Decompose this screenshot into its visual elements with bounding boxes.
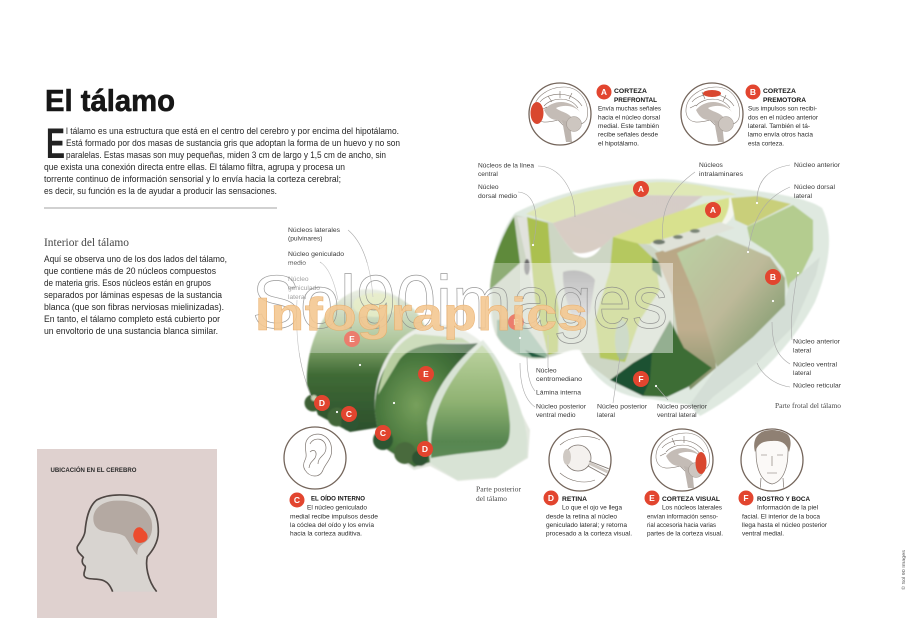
badges on illustration: F bbox=[638, 374, 644, 384]
callout F: rostro y boca: F bbox=[743, 493, 749, 503]
dark green base bbox=[610, 320, 712, 397]
title: El tálamo bbox=[45, 83, 175, 118]
callout D: retina: Lo que el ojo ve llega bbox=[562, 504, 622, 512]
anatomical labels: Núcleo posterior bbox=[657, 404, 708, 410]
nucleus marker dots bbox=[336, 202, 799, 413]
section: interior del tálamo: separados por láminas espesas de la sustancia bbox=[44, 290, 223, 300]
anatomical labels bbox=[288, 162, 842, 503]
callout E: corteza visual: partes de la corteza visual. bbox=[647, 530, 723, 538]
callout A: corteza prefrontal: hacia el núcleo dorsal bbox=[598, 114, 660, 122]
callout B: corteza premotora: esta corteza. bbox=[748, 140, 784, 148]
leader lines bbox=[297, 165, 797, 407]
lower left teal area bbox=[497, 318, 548, 358]
callout C: el oído interno bbox=[284, 427, 378, 538]
illustration: thalamus back part bbox=[304, 289, 530, 481]
icon: brain with prefrontal cortex bbox=[529, 83, 591, 145]
badges on illustration: F bbox=[513, 317, 519, 327]
callout C: el oído interno: EL OÍDO INTERNO bbox=[311, 494, 365, 502]
grey band with nuclei bbox=[650, 222, 735, 252]
section: interior del tálamo: que contiene más de 20 núcleos compuestos bbox=[44, 266, 216, 276]
anatomical labels: ventral lateral bbox=[657, 412, 697, 419]
callout A: corteza prefrontal: recibe señales desde bbox=[598, 132, 658, 138]
anatomical labels: Núcleo posterior bbox=[597, 404, 648, 410]
cross section base bbox=[492, 215, 680, 385]
anatomical labels: Parte frotal del tálamo bbox=[775, 402, 842, 410]
callout A: corteza prefrontal: A bbox=[601, 87, 607, 97]
badges on illustration: E bbox=[423, 369, 429, 379]
section: interior del tálamo: Interior del tálamo bbox=[44, 237, 129, 249]
pink band bbox=[553, 195, 703, 257]
intro text block: paralelas. Estas masas son muy pequeñas, miden 3 cm de largo y 1,5 cm de ancho, sin bbox=[66, 150, 386, 160]
badges on illustration bbox=[314, 181, 781, 457]
anatomical labels: Núcleo ventral bbox=[793, 362, 838, 368]
anatomical labels: Núcleos bbox=[699, 162, 724, 169]
intro text block: l tálamo es una estructura que está en el centro del cerebro y por encima del hipotálamo. bbox=[66, 126, 399, 136]
callout A: corteza prefrontal: PREFRONTAL bbox=[614, 97, 657, 104]
anatomical labels: Núcleo bbox=[536, 368, 557, 374]
icon: eye bbox=[549, 429, 612, 491]
callout F: rostro y boca: ventral medial. bbox=[742, 530, 784, 538]
intro text block: Está formado por dos masas de sustancia gris que adoptan la forma de un huevo y no son bbox=[66, 138, 400, 148]
badges on illustration: C bbox=[380, 428, 386, 438]
second yellow band bbox=[613, 197, 735, 244]
callout C: el oído interno: C bbox=[294, 495, 300, 505]
anatomical labels: Núcleo posterior bbox=[536, 404, 587, 410]
anatomical labels: Núcleo bbox=[288, 276, 309, 283]
right green plate bbox=[677, 235, 785, 367]
white notch bbox=[572, 247, 601, 258]
anatomical labels: ventral medio bbox=[536, 412, 576, 419]
callout C: el oído interno: hacia la corteza auditiva. bbox=[290, 530, 362, 538]
section: interior del tálamo: blanca (que son fibras nerviosas mielinizadas). bbox=[44, 302, 224, 312]
top yellow band bbox=[526, 182, 737, 223]
grey stripe bbox=[517, 217, 558, 345]
callout A: corteza prefrontal: medial. Este también bbox=[598, 123, 659, 130]
callout F: rostro y boca: Información de la piel bbox=[757, 504, 818, 512]
callout E: corteza visual: envían información senso- bbox=[647, 514, 718, 520]
callout F: rostro y boca: ROSTRO Y BOCA bbox=[757, 496, 810, 503]
anatomical labels: (pulvinares) bbox=[288, 236, 322, 242]
illustration: thalamus front part bbox=[490, 179, 829, 416]
callout E: corteza visual bbox=[644, 429, 723, 538]
callout B: corteza premotora: dos en el núcleo anterior bbox=[748, 114, 819, 122]
callout C: el oído interno: medial recibe impulsos desde bbox=[290, 514, 378, 520]
anatomical labels: lateral bbox=[794, 193, 812, 200]
anatomical labels: central bbox=[478, 171, 498, 178]
callout B: corteza premotora: PREMOTORA bbox=[763, 97, 806, 104]
olive front bbox=[731, 196, 791, 226]
callout E: corteza visual: Los núcleos laterales bbox=[662, 504, 722, 512]
callout A: corteza prefrontal: CORTEZA bbox=[614, 88, 647, 95]
callout A: corteza prefrontal: el hipotálamo. bbox=[598, 140, 639, 148]
back bulb bbox=[307, 289, 430, 432]
callout A: corteza prefrontal: Envía muchas señales bbox=[598, 106, 661, 112]
callout B: corteza premotora: CORTEZA bbox=[763, 88, 796, 95]
callout D: retina: D bbox=[548, 493, 554, 503]
anatomical labels: Lámina interna bbox=[536, 390, 581, 396]
anatomical labels: lateral bbox=[597, 412, 615, 419]
callout E: corteza visual: E bbox=[649, 493, 655, 503]
icon: face bbox=[741, 429, 803, 492]
panel: ubicación en el cerebro: UBICACIÓN EN EL CEREBRO bbox=[50, 465, 136, 474]
anatomical labels: Núcleo anterior bbox=[793, 338, 841, 346]
anatomical labels: Núcleo anterior bbox=[794, 162, 841, 169]
panel: ubicación en el cerebro bbox=[37, 449, 217, 618]
anatomical labels: Núcleo reticular bbox=[793, 382, 842, 390]
intro text block bbox=[44, 120, 400, 196]
icon: ear bbox=[284, 427, 346, 489]
callout D: retina: RETINA bbox=[562, 496, 587, 503]
badges on illustration: C bbox=[346, 409, 352, 419]
callout F: rostro y boca: facial. El interior de la boca bbox=[742, 514, 820, 520]
anatomical labels: del tálamo bbox=[476, 495, 508, 503]
right stripe bbox=[595, 236, 660, 362]
badges on illustration: D bbox=[422, 444, 428, 454]
anatomical labels: lateral bbox=[288, 294, 306, 301]
callout D: retina: desde la retina al núcleo bbox=[546, 514, 617, 520]
intro text block: E bbox=[46, 120, 65, 168]
callout B: corteza premotora bbox=[681, 83, 819, 148]
section: interior del tálamo: Aquí se observa uno de los dos lados del tálamo, bbox=[44, 254, 227, 264]
section: interior del tálamo: de materia gris. Esos núcleos están en grupos bbox=[44, 278, 211, 288]
anatomical labels: medio bbox=[288, 260, 306, 267]
callout B: corteza premotora: B bbox=[750, 87, 756, 97]
anatomical labels: lateral bbox=[793, 370, 811, 377]
anatomical labels: Núcleos de la línea bbox=[478, 162, 534, 170]
anatomical labels: Núcleo dorsal bbox=[794, 184, 836, 191]
pale lower band bbox=[690, 257, 820, 414]
anatomical labels: Núcleos laterales bbox=[288, 227, 341, 234]
callout C: el oído interno: El núcleo geniculado bbox=[307, 504, 367, 512]
section: interior del tálamo: En tanto, el tálamo completo está cubierto por bbox=[44, 314, 220, 324]
callout D: retina: procesado a la corteza visual. bbox=[546, 530, 632, 538]
watermark: Infographics bbox=[255, 288, 588, 340]
badges on illustration: D bbox=[319, 398, 325, 408]
icon: brain with premotor cortex bbox=[681, 83, 743, 145]
callout B: corteza premotora: lateral. También el tá- bbox=[748, 123, 810, 130]
anatomical labels: lateral bbox=[793, 348, 811, 354]
callout F: rostro y boca bbox=[738, 429, 828, 538]
watermark: Sol90images bbox=[252, 260, 668, 344]
badges on illustration: B bbox=[770, 272, 776, 282]
credit: © Sol 90 Images bbox=[900, 549, 907, 590]
front bulb bbox=[375, 325, 530, 481]
badges on illustration: E bbox=[349, 334, 355, 344]
icon: head with brain bbox=[77, 495, 158, 592]
section: interior del tálamo bbox=[44, 237, 227, 336]
dark green stripe bbox=[490, 217, 520, 290]
callout C: el oído interno: la cóclea del oído y los envía bbox=[290, 522, 374, 529]
translucent cap bbox=[427, 340, 527, 480]
tan interior wall bbox=[655, 237, 716, 390]
intro text block: que exista una conexión directa entre ellas. El tálamo filtra, agrupa y procesa un bbox=[44, 162, 345, 172]
yellow green stripe bbox=[527, 217, 559, 355]
anatomical labels: dorsal medio bbox=[478, 193, 517, 200]
callout F: rostro y boca: llega hasta el núcleo posterior bbox=[742, 522, 828, 529]
anatomical labels: Parte posterior bbox=[476, 486, 522, 494]
callout A: corteza prefrontal bbox=[529, 83, 661, 148]
outer capsule bbox=[490, 179, 829, 416]
badges on illustration: A bbox=[638, 184, 644, 194]
grey nucleus blob bbox=[563, 270, 595, 323]
callout B: corteza premotora: Sus impulsos son recibi- bbox=[748, 106, 817, 112]
intro text block: torrente continuo de información sensorial y lo envía hacia la corteza cerebral; bbox=[44, 174, 341, 184]
section: interior del tálamo: un envoltorio de una sustancia blanca similar. bbox=[44, 326, 218, 336]
callout D: retina: geniculado lateral; y retorna bbox=[546, 522, 627, 529]
anatomical labels: Núcleo bbox=[478, 184, 499, 191]
anatomical labels: Núcleo geniculado bbox=[288, 251, 344, 258]
upper right green bbox=[747, 205, 813, 297]
icon: brain with visual cortex bbox=[651, 429, 713, 491]
anatomical labels: geniculado bbox=[288, 285, 320, 292]
intro text block: es decir, su función es la de ayudar a producir las sensaciones. bbox=[44, 186, 277, 196]
anatomical labels: intralaminares bbox=[699, 171, 744, 178]
badges on illustration: A bbox=[710, 205, 716, 215]
callout D: retina bbox=[544, 429, 632, 538]
callout B: corteza premotora: lamo envía otros hacia bbox=[748, 132, 813, 138]
callout E: corteza visual: CORTEZA VISUAL bbox=[662, 496, 720, 503]
callout E: corteza visual: rial accesoria hacia varias bbox=[647, 522, 716, 529]
anatomical labels: centromediano bbox=[536, 376, 582, 383]
